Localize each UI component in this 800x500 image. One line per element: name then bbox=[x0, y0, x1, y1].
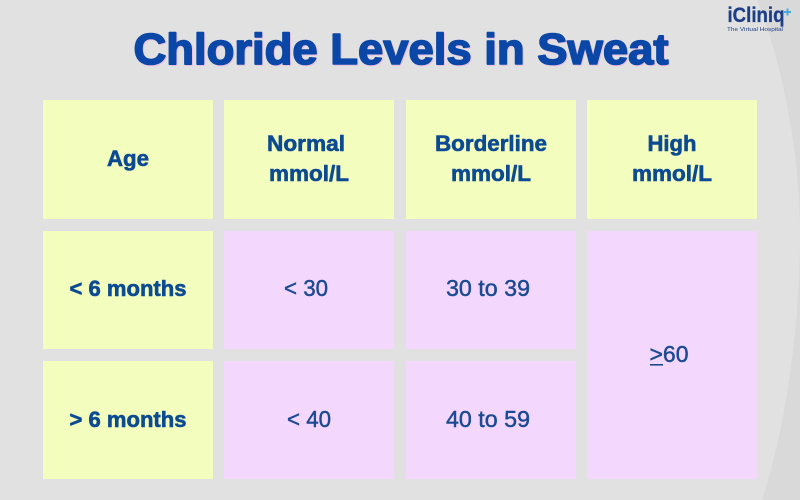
cell: high, spanning both age rows bbox=[587, 231, 757, 479]
table header: High mmol/L bbox=[587, 100, 757, 219]
cell: borderline over 6 months bbox=[406, 361, 576, 479]
table header: Normal mmol/L: Normal bbox=[267, 131, 345, 156]
cell: borderline under 6 months bbox=[406, 231, 576, 349]
title: Chloride Levels in Sweat bbox=[134, 25, 669, 74]
table header: Borderline mmol/L: Borderline bbox=[435, 131, 547, 156]
logo: iCliniq: The Virtual Hospital bbox=[727, 27, 783, 33]
cell: normal over 6 months bbox=[224, 361, 394, 479]
cell: normal under 6 months: < 30 bbox=[284, 275, 328, 301]
table header: High mmol/L: mmol/L bbox=[632, 161, 712, 186]
cell: normal under 6 months bbox=[224, 231, 394, 349]
table header: Age bbox=[43, 100, 213, 219]
row label: under 6 months: < 6 months bbox=[70, 276, 186, 301]
cell: borderline under 6 months: 30 to 39 bbox=[446, 275, 530, 301]
table header: Borderline mmol/L: mmol/L bbox=[451, 161, 531, 186]
table header: Borderline mmol/L bbox=[406, 100, 576, 219]
logo: iCliniq: iCliniq bbox=[728, 4, 784, 27]
cell: borderline over 6 months: 40 to 59 bbox=[446, 406, 530, 432]
row label: under 6 months bbox=[43, 231, 213, 349]
cell: high, spanning both age rows: >60 bbox=[650, 341, 688, 367]
table header: Normal mmol/L bbox=[224, 100, 394, 219]
table header: High mmol/L: High bbox=[648, 131, 696, 156]
row label: over 6 months bbox=[43, 361, 213, 479]
row label: over 6 months: > 6 months bbox=[70, 407, 186, 432]
table header: Age: Age bbox=[107, 146, 149, 171]
cell: normal over 6 months: < 40 bbox=[287, 406, 331, 432]
table header: Normal mmol/L: mmol/L bbox=[269, 161, 349, 186]
